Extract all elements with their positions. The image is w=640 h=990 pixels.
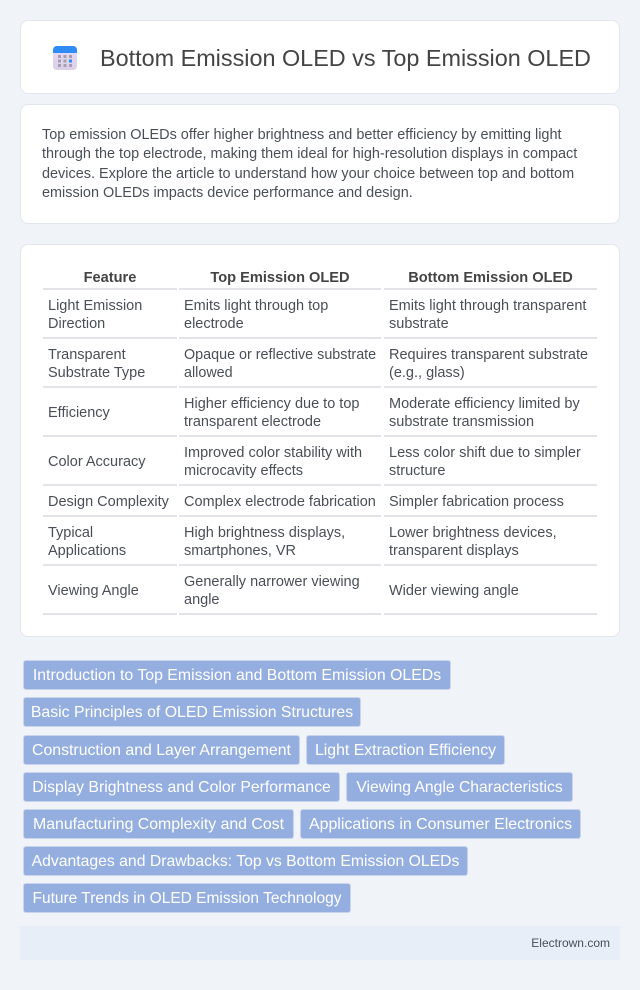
row: viewing angle <box>48 574 519 608</box>
row: color accuracy: Improved color stability with <box>184 445 362 461</box>
row: viewing angle: Viewing Angle <box>48 583 139 599</box>
row: viewing angle: Wider viewing angle <box>389 583 519 599</box>
topic tags <box>23 660 581 913</box>
table header: Top Emission OLED <box>210 270 350 286</box>
tag <box>23 660 451 690</box>
row: light emission direction: electrode <box>184 316 244 332</box>
row: transparent substrate type: (e.g., glass) <box>389 365 465 381</box>
tag: Light Extraction Efficiency <box>315 742 496 759</box>
text block: introduction: through the top electrode, making them ideal for high-resolution displays in compact <box>42 146 577 162</box>
tag: Basic Principles of OLED Emission Structures <box>31 704 353 721</box>
tag: Applications in Consumer Electronics <box>309 816 572 833</box>
table header <box>84 270 573 286</box>
tag: Future Trends in OLED Emission Technology <box>32 890 342 907</box>
row: light emission direction: Emits light through top <box>184 298 328 314</box>
row: typical applications: smartphones, VR <box>184 543 296 559</box>
tag <box>23 883 351 913</box>
row: typical applications: Typical <box>48 525 93 541</box>
panel: comparison table <box>20 244 620 637</box>
tag: Manufacturing Complexity and Cost <box>33 816 284 833</box>
row: design complexity <box>48 494 564 510</box>
row: efficiency: transparent electrode <box>184 414 321 430</box>
row: design complexity: Simpler fabrication process <box>389 494 564 510</box>
row: efficiency: Efficiency <box>48 405 110 421</box>
row: color accuracy <box>48 445 581 479</box>
footer bar <box>20 926 620 960</box>
tag <box>346 772 573 802</box>
tag: Advantages and Drawbacks: Top vs Bottom Emission OLEDs <box>32 853 459 870</box>
tag <box>306 735 505 765</box>
row: color accuracy: Less color shift due to simpler <box>389 445 581 461</box>
row: light emission direction <box>48 298 586 332</box>
row: typical applications <box>48 525 557 559</box>
row: typical applications: transparent displays <box>389 543 519 559</box>
row: color accuracy: microcavity effects <box>184 463 303 479</box>
row: transparent substrate type <box>48 347 588 381</box>
tag: Introduction to Top Emission and Bottom Emission OLEDs <box>33 667 441 684</box>
text block: introduction: emission OLEDs impacts device performance and design. <box>42 185 413 201</box>
tag <box>300 809 581 839</box>
row: design complexity: Complex electrode fabrication <box>184 494 376 510</box>
panel: title card <box>20 20 620 94</box>
row: transparent substrate type: allowed <box>184 365 233 381</box>
text block: introduction: devices. Explore the article to understand how your choice between top and bottom <box>42 166 574 182</box>
row: transparent substrate type: Transparent <box>48 347 126 363</box>
tag: Viewing Angle Characteristics <box>356 779 563 796</box>
title: Bottom Emission OLED vs Top Emission OLED <box>100 45 591 71</box>
panel: introduction <box>20 104 620 224</box>
row: viewing angle: Generally narrower viewing <box>184 574 360 590</box>
row: light emission direction: substrate <box>389 316 449 332</box>
row: transparent substrate type: Opaque or reflective substrate <box>184 347 376 363</box>
row: color accuracy: structure <box>389 463 445 479</box>
tag <box>23 846 468 876</box>
tag <box>23 697 361 727</box>
table header: Feature <box>84 270 136 286</box>
tag: Display Brightness and Color Performance <box>32 779 331 796</box>
row: typical applications: High brightness displays, <box>184 525 345 541</box>
table header: Bottom Emission OLED <box>408 270 573 286</box>
row: transparent substrate type: Requires transparent substrate <box>389 347 588 363</box>
row: light emission direction: Light Emission <box>48 298 142 314</box>
footer text: Electrown.com <box>531 936 610 950</box>
row: design complexity: Design Complexity <box>48 494 169 510</box>
text block: introduction: Top emission OLEDs offer higher brightness and better efficiency by emitting light <box>42 127 562 143</box>
icon: calendar <box>53 46 77 70</box>
text block: introduction <box>42 127 578 201</box>
row: efficiency: Moderate efficiency limited by <box>389 396 580 412</box>
row: typical applications: Applications <box>48 543 126 559</box>
row: light emission direction: Direction <box>48 316 105 332</box>
tag <box>23 772 340 802</box>
row: viewing angle: angle <box>184 592 219 608</box>
row: efficiency: Higher efficiency due to top <box>184 396 359 412</box>
row: light emission direction: Emits light through transparent <box>389 298 586 314</box>
tag <box>23 809 294 839</box>
tag: Construction and Layer Arrangement <box>32 742 291 759</box>
row: transparent substrate type: Substrate Type <box>48 365 145 381</box>
row: typical applications: Lower brightness devices, <box>389 525 557 541</box>
tag <box>23 735 300 765</box>
comparison table <box>43 270 597 615</box>
row: efficiency: substrate transmission <box>389 414 534 430</box>
row: color accuracy: Color Accuracy <box>48 454 146 470</box>
row: efficiency <box>48 396 580 430</box>
